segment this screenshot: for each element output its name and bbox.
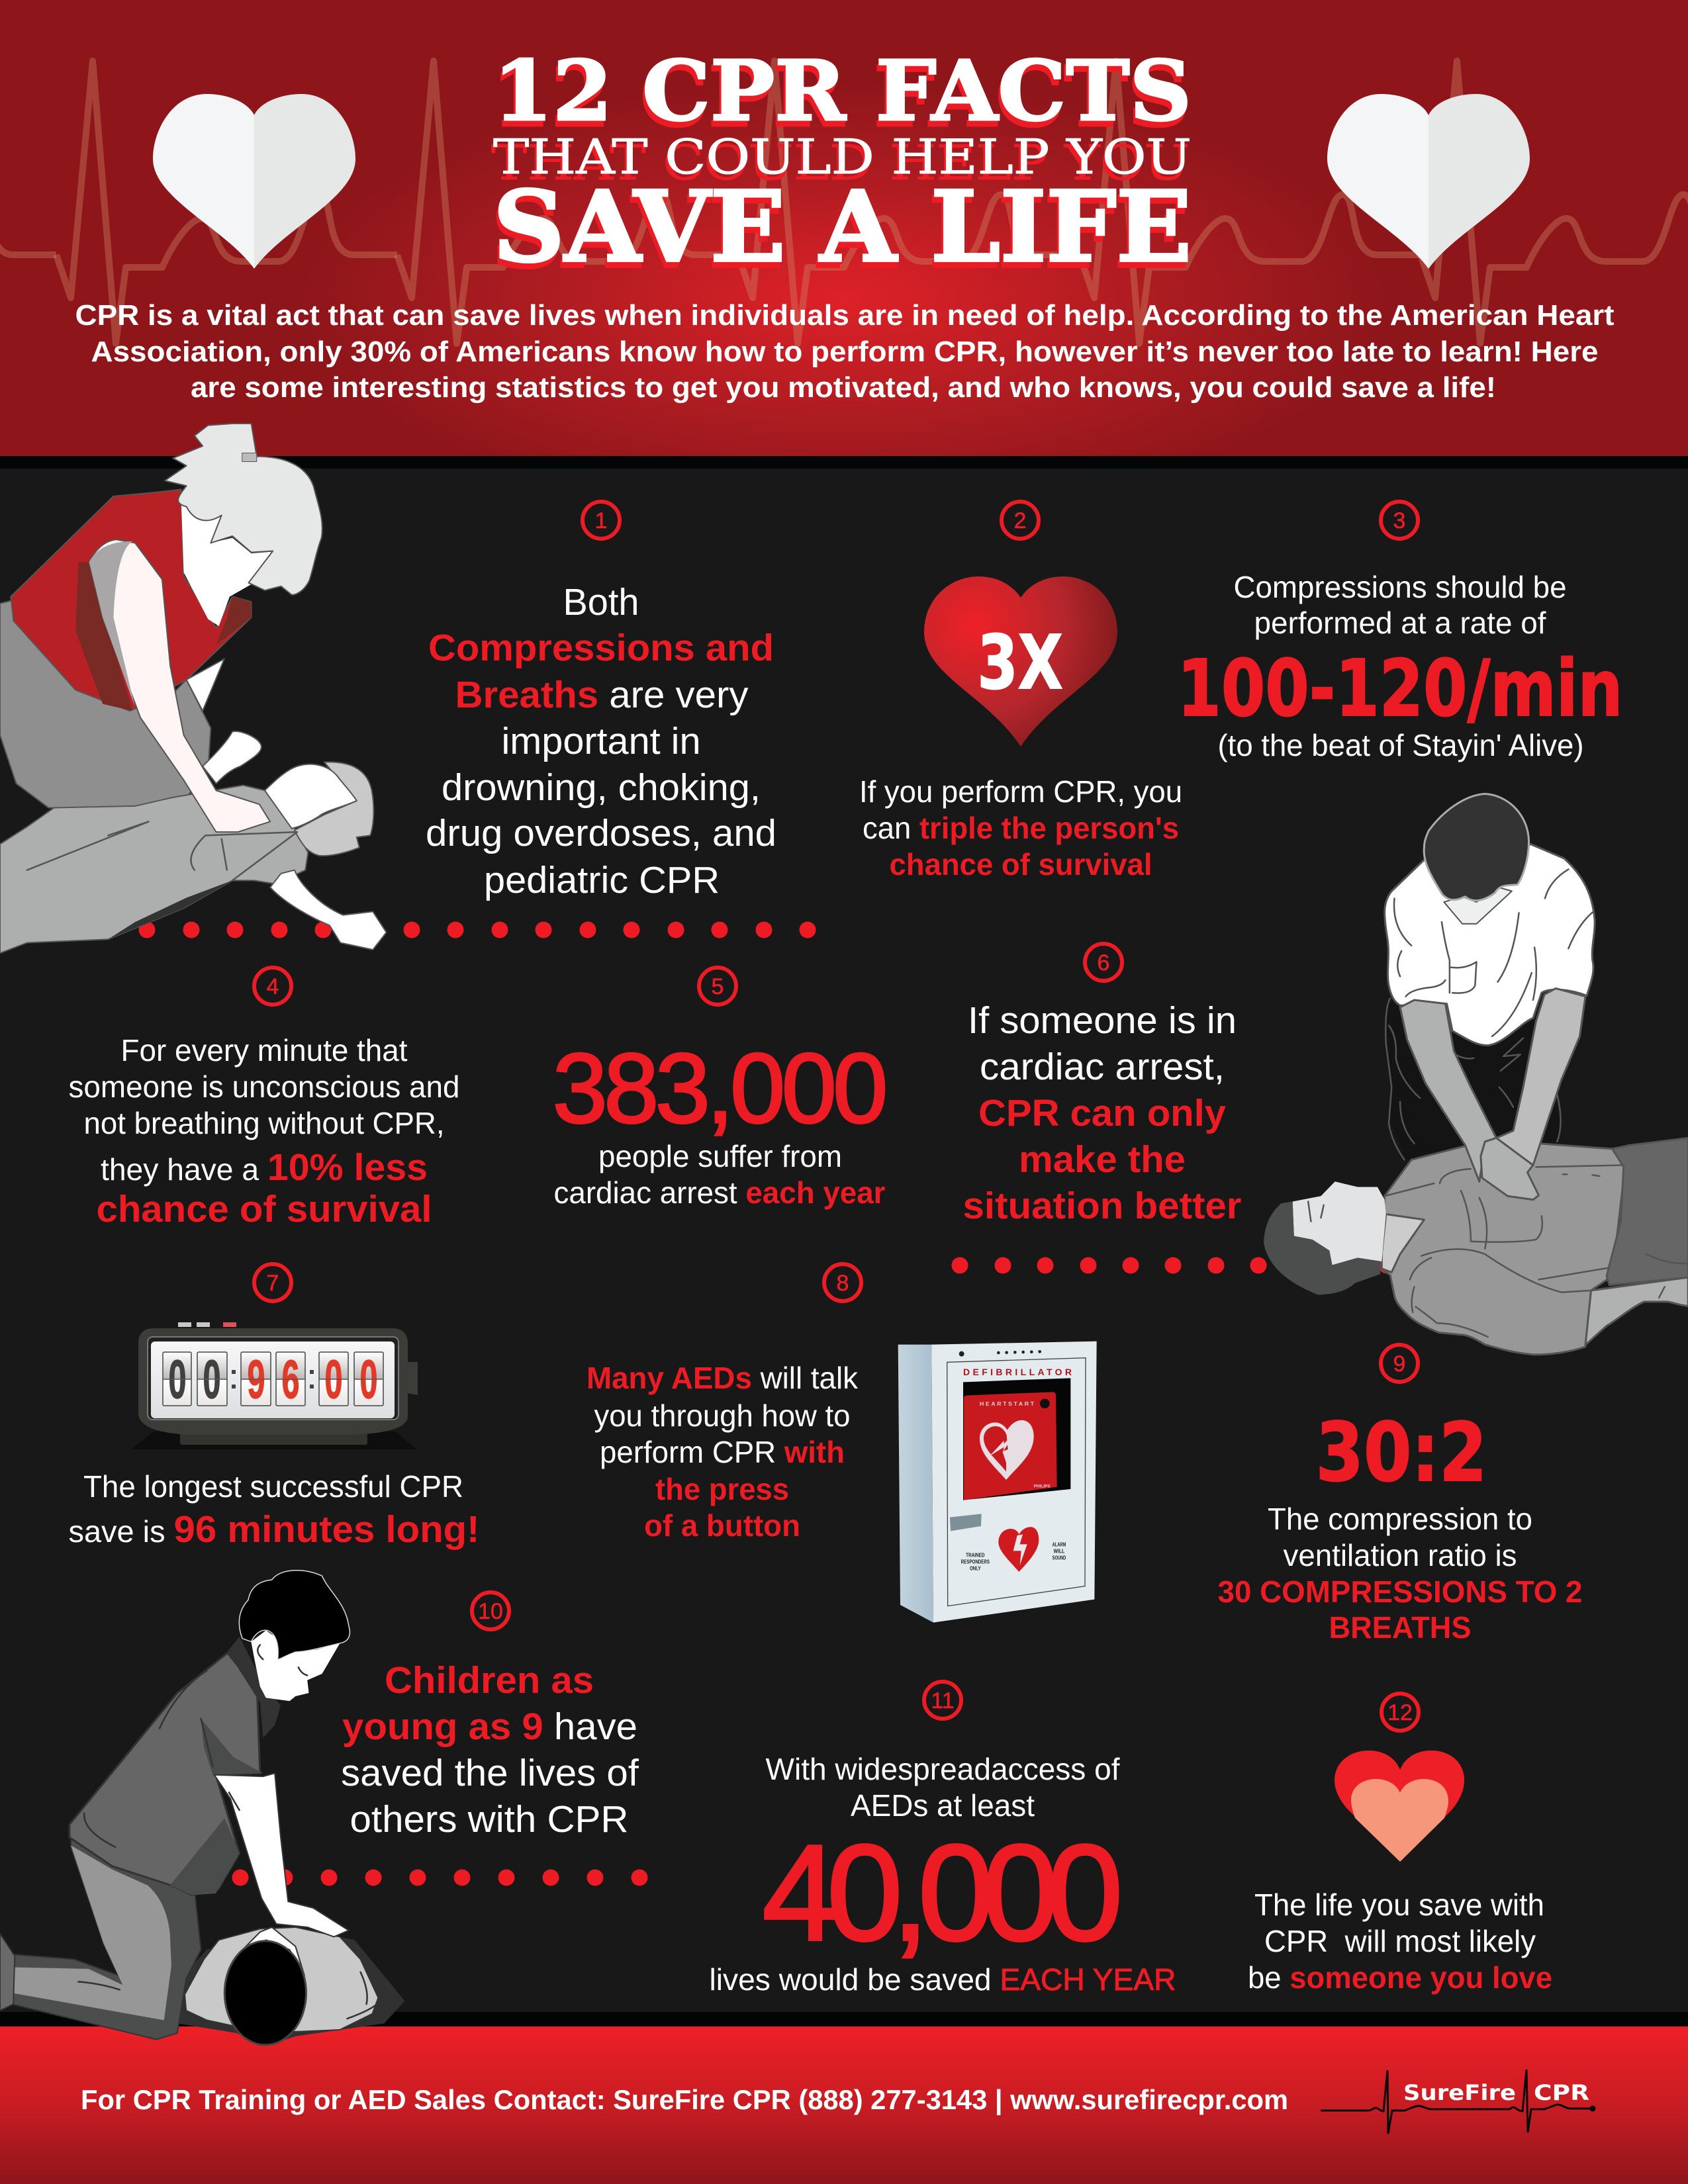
dotted divider 2	[952, 1257, 1395, 1273]
fact 6 text	[962, 999, 1242, 1227]
title: SAVE A LIFE	[493, 169, 1192, 284]
fact 2	[859, 502, 1182, 882]
dotted divider 1	[139, 921, 816, 938]
fact 11 text: AEDs at least	[851, 1788, 1035, 1823]
stat: 383,000: 383,000	[552, 1032, 888, 1144]
number badge 4	[254, 968, 291, 1005]
intro paragraph: are some interesting statistics to get you motivated, and who knows, you could save a life!	[191, 371, 1496, 404]
footer contact line: For CPR Training or AED Sales Contact: SureFire CPR (888) 277-3143 | www.surefirecpr.com	[81, 2084, 1288, 2116]
illustration: rescuer in red vest over victim	[0, 424, 387, 953]
fact 10	[341, 1592, 639, 1841]
number badge 4: 4	[267, 974, 279, 999]
fact 4 text: they have a 10% less	[101, 1146, 428, 1189]
fact 9 text: The compression to	[1268, 1502, 1532, 1536]
icon: flip clock	[131, 1322, 418, 1449]
fact 8 text	[586, 1361, 859, 1543]
title: THAT COULD HELP YOU	[493, 129, 1192, 185]
number badge 8	[824, 1264, 861, 1301]
fact 10 text	[341, 1659, 639, 1841]
illustration: AED cabinet: HEARTSTART	[980, 1400, 1035, 1407]
number badge 2: 2	[1014, 508, 1026, 533]
number badge 3: 3	[1393, 508, 1405, 533]
fact 4 text: not breathing without CPR,	[83, 1106, 445, 1140]
intro paragraph: Association, only 30% of Americans know how to perform CPR, however it’s never too late to learn! Here	[91, 336, 1598, 368]
fact 1	[426, 502, 776, 901]
fact 2 text: can triple the person's	[863, 811, 1179, 845]
icon: flip clock: 0	[360, 1349, 377, 1410]
icon: 3X heart	[924, 576, 1117, 747]
icon: double heart	[1335, 1751, 1464, 1862]
fact 5	[552, 968, 888, 1210]
fact 12 text: The life you save with	[1254, 1888, 1544, 1922]
fact 1 text: important in	[502, 720, 700, 762]
fact 10 text: young as 9 have	[342, 1706, 637, 1748]
fact 7	[69, 1264, 479, 1551]
fact 12 text	[1248, 1888, 1552, 1995]
fact 3 text: (to the beat of Stayin' Alive)	[1218, 728, 1583, 762]
fact 1 text: Compressions and	[428, 627, 774, 669]
number badge 5	[699, 968, 736, 1005]
fact 1 text: drug overdoses, and	[426, 812, 776, 854]
fact 1 text: drowning, choking,	[442, 766, 761, 809]
stat: 30:2: 30:2	[1316, 1406, 1487, 1500]
fact 8 text: you through how to	[594, 1398, 850, 1433]
fact 9 text: ventilation ratio is	[1283, 1538, 1517, 1572]
number badge 12	[1382, 1694, 1419, 1731]
number badge 7: 7	[267, 1271, 279, 1296]
icon: flip clock: 9	[248, 1349, 265, 1410]
fact 12 text: CPR will most likely	[1264, 1924, 1536, 1958]
intro paragraph	[75, 299, 1615, 404]
illustration: AED cabinet: SOUND	[1053, 1555, 1066, 1561]
icon: flip clock: 0	[203, 1349, 221, 1410]
fact 3 text: performed at a rate of	[1254, 606, 1546, 640]
fact 6 text: CPR can only	[978, 1092, 1226, 1134]
fact 7 text	[69, 1469, 479, 1551]
number badge 10: 10	[478, 1599, 503, 1624]
illustration: AED cabinet: PHILIPS	[1034, 1484, 1051, 1488]
fact 6 text: cardiac arrest,	[980, 1046, 1225, 1088]
fact 8 text: Many AEDs will talk	[586, 1361, 859, 1395]
number badge 11: 11	[931, 1688, 955, 1713]
intro paragraph: CPR is a vital act that can save lives when individuals are in need of help. According to the American Heart	[75, 299, 1615, 332]
icon: 3X heart: 3X	[977, 620, 1063, 706]
illustration: AED cabinet	[898, 1342, 1097, 1623]
footer band	[0, 2012, 1688, 2184]
number badge 5: 5	[712, 974, 724, 999]
fact 11	[710, 1682, 1176, 1997]
fact 7 text: The longest successful CPR	[83, 1469, 463, 1504]
number badge 3	[1381, 502, 1418, 539]
illustration: child performing CPR on manikin	[0, 1570, 405, 2046]
number badge 2	[1002, 502, 1039, 539]
logo: SureFire CPR: SureFire	[1403, 2080, 1516, 2105]
fact 2 text	[859, 774, 1182, 882]
number badge 12: 12	[1387, 1700, 1413, 1725]
title: 12 CPR FACTS	[493, 43, 1192, 140]
illustration: AED cabinet: ONLY	[970, 1566, 981, 1572]
fact 8 text: perform CPR with	[600, 1435, 845, 1469]
number badge 1: 1	[595, 508, 607, 533]
fact 6 text: If someone is in	[968, 999, 1237, 1042]
fact 4	[69, 968, 459, 1230]
number badge 9	[1381, 1345, 1418, 1382]
number badge 10	[472, 1592, 509, 1629]
fact 8	[586, 1264, 1097, 1623]
illustration: AED cabinet: WILL	[1054, 1549, 1064, 1555]
fact 10 text: others with CPR	[350, 1798, 629, 1841]
fact 8 text: of a button	[644, 1508, 800, 1543]
fact 5 text	[553, 1139, 886, 1210]
fact 11 text: With widespreadaccess of	[765, 1752, 1120, 1786]
icon: flip clock: 6	[282, 1349, 299, 1410]
illustration: AED cabinet: ALARM	[1053, 1542, 1066, 1548]
number badge 6: 6	[1098, 950, 1109, 976]
fact 11 text: 40,000	[763, 1817, 1123, 1969]
fact 1 text	[426, 581, 776, 901]
logo: SureFire CPR: CPR	[1534, 2080, 1589, 2105]
icon: flip clock: 0	[324, 1349, 343, 1410]
fact 8 text: the press	[655, 1472, 789, 1506]
fact 10 text: Children as	[385, 1659, 594, 1702]
icon: right paper heart	[1327, 94, 1530, 269]
icon: flip clock: 0	[168, 1349, 187, 1410]
title	[493, 43, 1192, 284]
number badge 9: 9	[1393, 1351, 1405, 1377]
number badge 6	[1085, 944, 1122, 981]
fact 1 text: Both	[563, 581, 639, 623]
fact 4 text: someone is unconscious and	[69, 1069, 459, 1104]
number badge 1	[583, 502, 620, 539]
fact 6 text: situation better	[962, 1185, 1242, 1227]
fact 6	[962, 944, 1242, 1227]
fact 6 text: make the	[1019, 1138, 1186, 1181]
fact 10 text: saved the lives of	[341, 1752, 639, 1794]
number badge 11	[924, 1682, 961, 1719]
fact 4 text	[69, 1033, 459, 1230]
illustration: AED cabinet: TRAINED	[966, 1553, 985, 1559]
number badge 8: 8	[837, 1271, 849, 1296]
fact 12	[1248, 1694, 1552, 1995]
fact 1 text: pediatric CPR	[484, 859, 720, 901]
icon: left paper heart	[153, 94, 355, 269]
fact 3 text	[1177, 570, 1623, 762]
heartbeat line background	[0, 61, 1688, 343]
fact 2 text: If you perform CPR, you	[859, 774, 1182, 809]
fact 3 text: Compressions should be	[1234, 570, 1566, 604]
fact 9	[1218, 1345, 1582, 1645]
fact 5 text: people suffer from	[598, 1139, 842, 1173]
fact 2 text: chance of survival	[890, 847, 1152, 882]
fact 9 text: 30 COMPRESSIONS TO 2	[1218, 1574, 1582, 1609]
fact 4 text: chance of survival	[97, 1188, 432, 1230]
illustration: AED cabinet: DEFIBRILLATOR	[963, 1367, 1072, 1377]
fact 12 text: be someone you love	[1248, 1960, 1552, 1995]
fact 4 text: For every minute that	[120, 1033, 408, 1068]
dotted divider 3	[232, 1869, 647, 1886]
fact 7 text: save is 96 minutes long!	[69, 1508, 479, 1551]
fact 11 text: lives would be saved EACH YEAR	[710, 1962, 1176, 1997]
fact 9 text	[1218, 1502, 1582, 1645]
fact 9 text: BREATHS	[1329, 1610, 1471, 1645]
illustration: rescuer compressing adult victim	[1264, 794, 1688, 1355]
illustration: AED cabinet: RESPONDERS	[961, 1559, 990, 1565]
fact 3	[1177, 502, 1623, 762]
number badge 7	[254, 1264, 291, 1301]
logo: SureFire CPR	[1321, 2070, 1595, 2134]
fact 1 text: Breaths are very	[455, 674, 749, 716]
fact 5 text: cardiac arrest each year	[553, 1175, 886, 1210]
fact 11 text	[710, 1752, 1176, 1997]
header band	[0, 0, 1688, 469]
